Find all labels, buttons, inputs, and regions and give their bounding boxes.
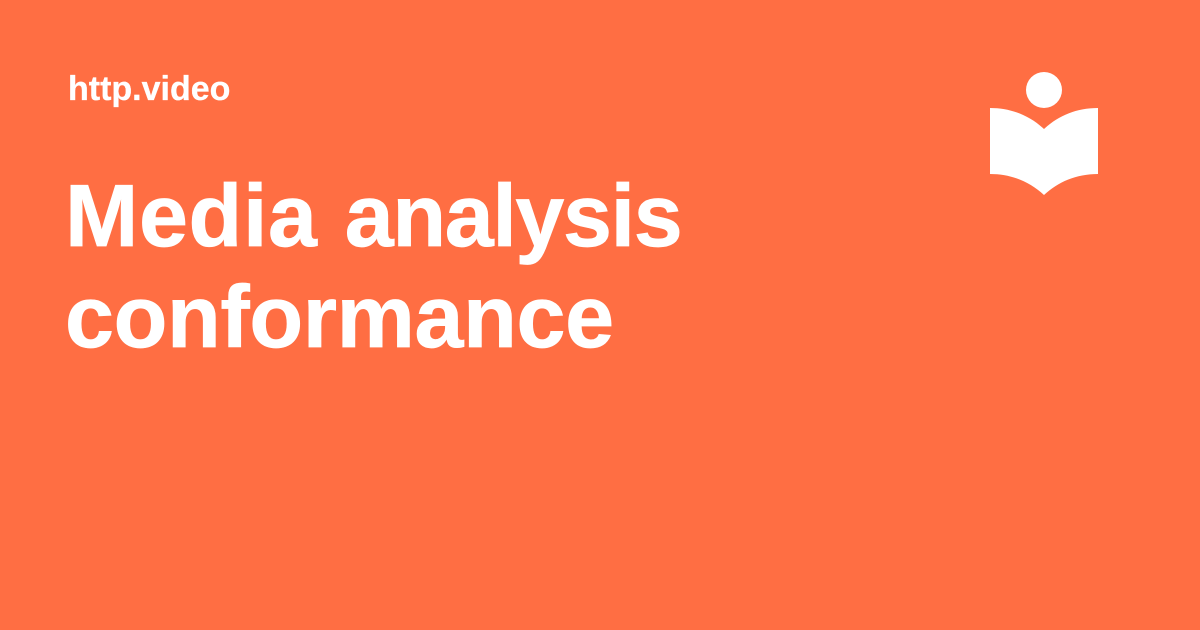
- icon: person reading book: [990, 72, 1098, 195]
- title: [65, 166, 681, 366]
- site name: http.video: [68, 70, 230, 108]
- title: Media analysis: [65, 166, 681, 265]
- title: conformance: [65, 267, 614, 366]
